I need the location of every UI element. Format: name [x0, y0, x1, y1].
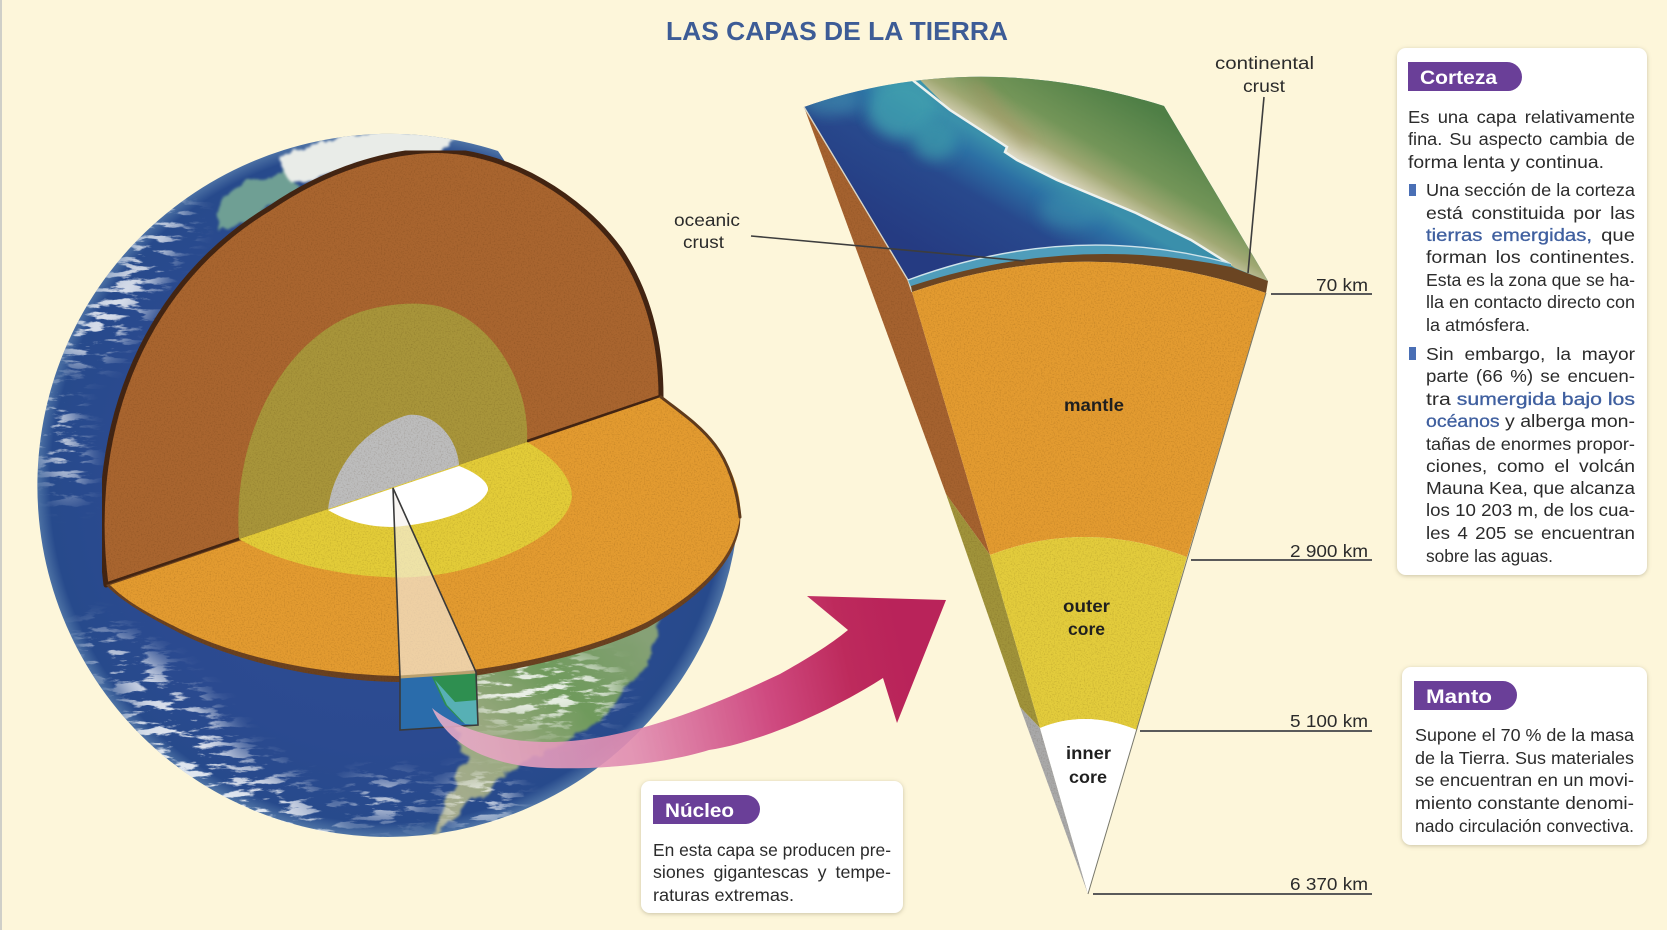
- bullet: tierras emergidas: forman los continentes.: [1426, 247, 1635, 267]
- text: Núcleo body: raturas extremas.: [653, 885, 794, 905]
- bullet: tierras emergidas: está constituida por las: [1426, 203, 1635, 223]
- curved arrow: [432, 596, 946, 768]
- label: outer core: [1063, 596, 1110, 639]
- bullet: sumergida bajo los océanos: parte (66 %) se encuen-: [1426, 366, 1635, 386]
- label: inner core: core: [1069, 767, 1107, 787]
- bullet: tierras emergidas: Una sección de la corteza: [1426, 180, 1635, 200]
- text: Manto body: de la Tierra. Sus materiales: [1415, 748, 1634, 768]
- oceanic crust band: [908, 245, 1231, 287]
- bullet: tierras emergidas: [1409, 180, 1635, 335]
- top surface: ocean and land: [804, 76, 1268, 281]
- text: Manto body: Supone el 70 % de la masa: [1415, 725, 1634, 745]
- heading: Manto: Manto: [1426, 687, 1492, 708]
- floor: mantle: [110, 397, 740, 676]
- side wall: [804, 107, 1088, 894]
- panel: Núcleo: [641, 781, 903, 913]
- label: outer core: core: [1068, 619, 1105, 639]
- crust band: [911, 254, 1268, 293]
- floor: inner core: [328, 466, 488, 527]
- back wall: outer core: [238, 304, 527, 539]
- depth marker: 70 km: 70 km: [1316, 275, 1368, 295]
- bullet: tierras emergidas: lla en contacto directo con: [1426, 292, 1635, 312]
- callout: oceanic crust: crust: [683, 232, 724, 252]
- bullet: tierras emergidas: la atmósfera.: [1426, 315, 1530, 335]
- bullet: sumergida bajo los océanos: Sin embargo, la mayor: [1426, 344, 1635, 364]
- heading: Núcleo: [653, 795, 760, 824]
- floor: outer core: [239, 442, 572, 578]
- text: Corteza intro: Es una capa relativamente: [1408, 107, 1635, 127]
- heading: Manto: [1414, 681, 1517, 710]
- extraction wedge: [393, 488, 478, 730]
- text: Manto body: se encuentran en un movi-: [1415, 770, 1634, 790]
- text: Núcleo body: [653, 840, 891, 905]
- panel: Manto: [1402, 667, 1647, 845]
- callout: continental crust: continental: [1215, 53, 1314, 73]
- label: outer core: outer: [1063, 596, 1110, 616]
- crust wedge illustration: [790, 60, 1290, 894]
- globe cutaway illustration: [32, 126, 740, 901]
- depth marker: 70 km: [1271, 275, 1372, 295]
- inner core: [1040, 719, 1137, 894]
- bullet: sumergida bajo los océanos: tañas de enormes propor-: [1426, 434, 1635, 454]
- label: inner core: inner: [1066, 743, 1111, 763]
- text: Núcleo body: siones gigantescas y tempe-: [653, 862, 891, 882]
- bullet: sumergida bajo los océanos: [1409, 344, 1635, 566]
- mantle: [912, 262, 1266, 557]
- callout: continental crust: [1215, 53, 1314, 273]
- depth marker: 2 900 km: 2 900 km: [1290, 541, 1368, 561]
- heading: Corteza: Corteza: [1420, 68, 1497, 89]
- bullet: sumergida bajo los océanos: ciones, como el volcán: [1426, 456, 1635, 476]
- text: Corteza intro: fina. Su aspecto cambia de: [1408, 129, 1635, 149]
- bullet: tierras emergidas: tierras emergidas, que: [1426, 225, 1635, 245]
- floor: crust rim: [106, 397, 740, 682]
- bullet: sumergida bajo los océanos: los 10 203 m, de los cua-: [1426, 500, 1635, 520]
- label: inner core: [1066, 743, 1111, 787]
- title: LAS CAPAS DE LA TIERRA: [666, 18, 1008, 46]
- callout: continental crust: crust: [1243, 76, 1285, 96]
- label: mantle: mantle: [1064, 395, 1124, 415]
- back wall: inner core: [328, 415, 459, 510]
- outer core: [990, 537, 1187, 730]
- depth marker: 5 100 km: 5 100 km: [1290, 711, 1368, 731]
- callout: oceanic crust: oceanic: [674, 210, 740, 230]
- panel: Corteza: [1397, 48, 1647, 575]
- callout: oceanic crust: [674, 210, 1025, 261]
- text: Corteza intro: [1408, 107, 1635, 172]
- text: Corteza intro: forma lenta y continua.: [1408, 152, 1604, 172]
- earth sphere: [37, 134, 736, 837]
- bullet: sumergida bajo los océanos: tra sumergida bajo los: [1426, 389, 1635, 409]
- bullet: sumergida bajo los océanos: Mauna Kea, que alcanza: [1426, 478, 1635, 498]
- bullet: tierras emergidas: Esta es la zona que se ha-: [1426, 270, 1635, 290]
- depth marker: 6 370 km: 6 370 km: [1290, 874, 1368, 894]
- bullet: sumergida bajo los océanos: les 4 205 se encuentran: [1426, 523, 1635, 543]
- bullet: sumergida bajo los océanos: sobre las aguas.: [1426, 546, 1553, 566]
- heading: Núcleo: Núcleo: [665, 801, 734, 822]
- heading: Corteza: [1408, 62, 1522, 91]
- back wall of the cut: mantle: [102, 151, 661, 585]
- text: Manto body: [1415, 725, 1634, 836]
- bullet: sumergida bajo los océanos: océanos y alberga mon-: [1426, 411, 1635, 431]
- text: Núcleo body: En esta capa se producen pre-: [653, 840, 891, 860]
- text: Manto body: miento constante denomi-: [1415, 793, 1634, 813]
- text: Manto body: nado circulación convectiva.: [1415, 816, 1634, 836]
